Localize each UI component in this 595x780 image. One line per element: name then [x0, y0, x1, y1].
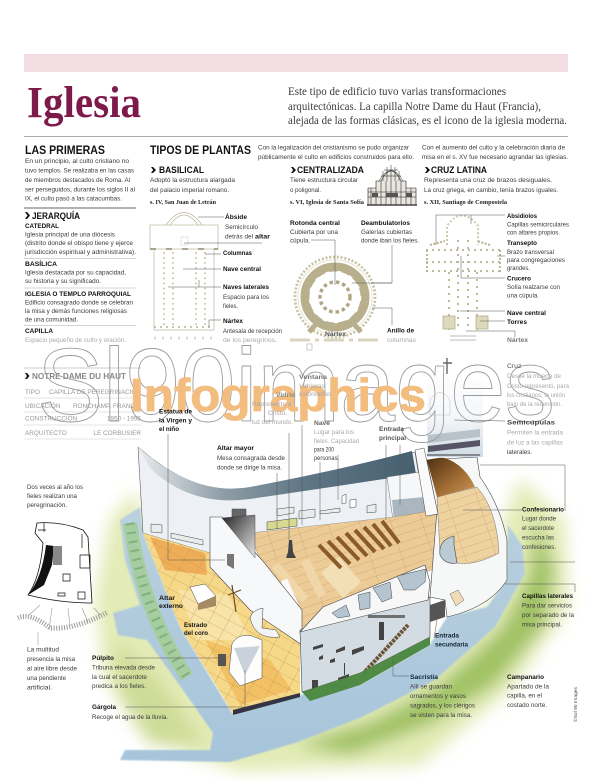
bell tower: [427, 358, 483, 457]
label: nave: fieles. Capacidad: [314, 438, 359, 445]
rotunda labels: Deambulatorios: [361, 220, 410, 227]
label: cruz: Cristo representó, para: [507, 383, 569, 390]
panel: jerarquía: Iglesia destacada por su capacidad,: [25, 270, 126, 276]
panel: jerarquía: IGLESIA O TEMPLO PARROQUIAL: [25, 291, 131, 298]
label: ventana: [299, 374, 332, 398]
panel: jerarquía: [24, 208, 136, 344]
basilica labels: Naves laterales: [223, 284, 269, 291]
cross plan labels: Capillas semicirculares: [507, 222, 570, 228]
panel: notre dame du haut: [24, 368, 142, 439]
basilica labels: altar: [255, 234, 270, 240]
label: sacristía: Sacristía: [410, 674, 438, 681]
brown semidome: [427, 458, 475, 497]
cross plan labels: Nave central: [507, 310, 546, 317]
crosses on platform: [228, 585, 241, 612]
panel: notre dame du haut: 1950 - 1955: [107, 416, 141, 422]
cross plan labels: Transepto: [507, 240, 537, 247]
intro text: alejada de las formas clásicas, es el icono de la iglesia moderna.: [288, 114, 567, 127]
heading: tipos de plantas: TIPOS DE PLANTAS: [150, 143, 251, 157]
label: entrada principal: principal: [379, 435, 406, 442]
intro text: arquitectónicas. La capilla Notre Dame du Haut (Francia),: [288, 100, 541, 113]
label: campanario: Apartado de la: [507, 684, 549, 690]
panel: jerarquía: Edificio consagrado donde se celebran: [25, 300, 133, 306]
label: estrado del coro: Estrado: [184, 622, 207, 629]
label: vidrio: Vidrio: [276, 392, 295, 399]
label: altar mayor: donde se dirige la misa.: [217, 464, 282, 472]
plan type: centralizada: Tiene estructura circular: [290, 177, 359, 184]
label: cruz: [507, 363, 569, 408]
label: sacristía: ornamentos y vasos: [410, 693, 467, 700]
small pilgrimage site plan: presencia la misa: [27, 656, 75, 663]
cross plan labels: Crucero: [507, 276, 531, 282]
south facade wall: [300, 597, 430, 692]
label: semicúpulas: [507, 420, 564, 456]
label: campanario: costado norte.: [507, 702, 547, 709]
rotunda labels: Rotonda central: [290, 220, 340, 227]
label: confesionario: Lugar donde: [522, 516, 556, 522]
label: estrado del coro: del coro: [184, 630, 208, 637]
roof underside: [138, 447, 416, 500]
label: campanario: [507, 674, 549, 709]
label: altar mayor: [217, 445, 285, 472]
panel: jerarquía: su historia y su significado.: [25, 278, 101, 285]
label: campanario: capilla, en el: [507, 692, 543, 700]
intro text: Este tipo de edificio tuvo varias transformaciones: [288, 85, 506, 98]
label: altar externo: [159, 595, 183, 610]
landscape: vegetation strip in moat: [130, 523, 187, 677]
intro text: [288, 85, 567, 127]
plan type: basilical: Adoptó la estructura alargada: [150, 177, 235, 184]
rotunda labels: [290, 220, 419, 344]
label: entrada principal: [379, 426, 406, 442]
facade windows: [312, 615, 405, 692]
label: confesionario: confesiones.: [522, 544, 556, 551]
plan type: centralizada: o poligonal.: [290, 187, 321, 194]
plan type: basilical: s. IV, San Juan de Letrán: [150, 200, 217, 206]
cross plan labels: Torres: [507, 319, 527, 326]
label: entrada secundaria: secundaria: [435, 642, 468, 648]
panel: jerarquía: de una comunidad.: [25, 316, 78, 324]
panel: notre dame du haut: RONCHAMP, FRANCIA: [73, 403, 142, 410]
label: confesionario: escucha las: [522, 534, 555, 542]
rotunda labels: Galerías cubiertas: [361, 229, 413, 236]
small pilgrimage site plan: peregrinación.: [27, 502, 67, 509]
label: cruz: bajo de la redención.: [507, 401, 562, 408]
panel: jerarquía: la misa y demás funciones religiosas: [25, 308, 128, 315]
exterior stairs: [360, 625, 408, 677]
label: ventana: Ventana: [299, 374, 327, 381]
plan type: cruz latina: [424, 165, 558, 206]
heading: tipos de plantas: misa en el s. XV fue necesario agrandar las iglesias.: [422, 154, 568, 161]
panel: notre dame du haut: CAPILLA DE PEREGRINACIÓN: [49, 387, 141, 396]
grey wall at right of nave: [387, 472, 426, 520]
small pilgrimage site plan: una pendiente: [27, 675, 66, 682]
cross plan labels: Solía realzarse con: [507, 284, 560, 291]
plan type: centralizada: [290, 165, 364, 206]
panel: las primeras: tuvo templos. Se realizaba en las casas: [25, 168, 135, 174]
small pilgrimage site plan: artificial.: [27, 684, 52, 692]
image credit: ©Sol 90 Images: [572, 686, 578, 722]
label: púlpito: [92, 655, 155, 690]
landscape: grass: [95, 478, 568, 772]
small pilgrimage site plan: fieles realizan una: [27, 493, 77, 500]
cross plan labels: con altares propios.: [507, 230, 560, 236]
panel: jerarquía: JERARQUÍA: [32, 211, 80, 222]
label: capillas laterales: por separado de la: [522, 612, 574, 619]
plan type: cruz latina: La cruz griega, en cambio, tenía brazos iguales.: [424, 187, 558, 194]
cross plan labels: [436, 213, 570, 344]
rotunda labels: columnas: [387, 337, 417, 344]
label: púlpito: predica a los fieles.: [92, 683, 146, 690]
rotunda labels: Nártex: [325, 331, 346, 338]
watermark: outline lettering: Sl90images: [37, 328, 555, 444]
panel: notre dame du haut: ARQUITECTO: [25, 430, 67, 437]
label: cruz: Cruz: [507, 363, 522, 370]
basilica labels: Ábside: [225, 212, 247, 221]
plan type: basilical: del palacio imperial romano.: [150, 187, 229, 194]
heading: tipos de plantas: públicamente el culto en edificios construidos para ello.: [258, 154, 414, 161]
white slanted wall: [210, 517, 302, 645]
south chapel tower: [229, 635, 262, 686]
basilica labels: [168, 212, 282, 344]
basilica labels: detrás del: [225, 234, 254, 240]
heading: tipos de plantas: [150, 143, 568, 161]
panel: jerarquía: Iglesia principal de una diócesis: [25, 232, 116, 238]
small pilgrimage site plan: Dos veces al año los: [27, 484, 84, 491]
panel: jerarquía: jurisdicción espiritual y administrativa).: [24, 249, 136, 256]
panel: notre dame du haut: LE CORBUSIER: [93, 430, 141, 437]
label: nave: para 200: [314, 446, 334, 454]
basilica labels: Semicírculo: [225, 224, 258, 231]
label: confesionario: el sacerdote: [522, 525, 554, 532]
label: semicúpulas: Permiten la entrada: [507, 430, 563, 436]
panel: notre dame du haut: CONSTRUCCIÓN: [25, 414, 78, 422]
label: sacristía: [410, 674, 476, 719]
basilica labels: Nave central: [223, 266, 261, 273]
outdoor altar: [190, 584, 216, 604]
round chapel: [440, 536, 457, 563]
east floor: [437, 487, 499, 564]
basilica labels: Columnas: [223, 250, 252, 257]
label: púlpito: Púlpito: [92, 655, 114, 662]
label: sacristía: se visten para la misa.: [410, 712, 472, 719]
panel: las primeras: En un principio, al culto cristiano no: [25, 158, 129, 165]
label: sacristía: sagrados, y los clérigos: [410, 702, 476, 710]
basilica labels: fieles.: [223, 303, 238, 310]
east curved wall: [427, 457, 507, 617]
plan type: basilical: [150, 165, 235, 206]
label: semicúpulas: de luz a las capillas: [507, 440, 564, 446]
label: nave: [314, 420, 359, 462]
rotunda labels: cúpula.: [290, 238, 310, 244]
landscape: water moat: [113, 507, 525, 762]
plan type: basilical: BASILICAL: [159, 165, 204, 176]
label: ventana: coloreadas: [299, 391, 332, 398]
label: capillas laterales: Para dar servicios: [522, 602, 573, 610]
cross plan labels: Nártex: [507, 337, 528, 344]
floor plan: basilica: [150, 212, 218, 338]
heading: tipos de plantas: Con el aumento del culto y la celebración diaria de: [422, 144, 565, 152]
panel: jerarquía: CAPILLA: [25, 328, 53, 335]
label: vidrio: Representa a: [252, 401, 292, 408]
label: nave: Lugar para los: [314, 429, 355, 436]
basilica labels: Nártex: [223, 318, 243, 325]
central column: [415, 448, 438, 516]
label: capillas laterales: Capillas laterales: [522, 593, 573, 600]
choir platform: [250, 608, 280, 637]
label: vidrio: Cristo,: [268, 410, 287, 417]
north wall: [138, 447, 425, 560]
chapels: [332, 569, 426, 618]
header banner: [24, 54, 568, 72]
panel: jerarquía: Espacio pequeño de culto y oración.: [25, 337, 126, 344]
church cutaway illustration: [130, 447, 507, 720]
label: estatua: la Virgen y: [159, 418, 192, 424]
label: gárgola: Gárgola: [92, 704, 116, 711]
rotunda labels: donde iban los fieles.: [361, 238, 419, 244]
exterior platform: [143, 533, 300, 713]
panel: jerarquía: (distrito donde el obispo tiene y ejerce: [25, 240, 133, 247]
label: entrada secundaria: Entrada: [435, 632, 459, 640]
rotunda labels: Anillo de: [387, 328, 414, 334]
plan type: cruz latina: s. XII, Santiago de Compostela: [424, 200, 507, 206]
basilica labels: de los peregrinos.: [223, 337, 277, 344]
label: gárgola: Recoge el agua de la lluvia.: [92, 714, 168, 721]
label: vidrio: [252, 392, 295, 426]
label: capillas laterales: [522, 593, 574, 628]
label: semicúpulas: Semicúpulas: [507, 420, 555, 426]
panel: jerarquía: CATEDRAL: [25, 223, 59, 230]
cross plan labels: para congregaciones: [507, 257, 566, 264]
small pilgrimage site plan: [18, 484, 108, 692]
watermark: orange lettering: Infographics: [130, 369, 426, 421]
panel: las primeras: [25, 143, 136, 202]
leader lines: [125, 420, 575, 707]
label: altar mayor: Altar mayor: [217, 445, 254, 452]
label: altar externo: externo: [159, 603, 183, 610]
label: púlpito: la cual el sacerdote: [92, 674, 147, 681]
panel: las primeras: LAS PRIMERAS: [25, 143, 105, 157]
plan type: cruz latina: Representa una cruz de brazos desiguales.: [424, 177, 552, 184]
cross plan labels: Absidiolos: [507, 213, 537, 220]
label: estrado del coro: [184, 622, 208, 637]
label: vidrio: luz del mundo.: [252, 419, 293, 426]
label: estatua: Estatua de: [159, 408, 192, 416]
floor plan: rotunda: [290, 257, 380, 350]
plan type: cruz latina: CRUZ LATINA: [431, 165, 487, 176]
panel: notre dame du haut: UBICACIÓN: [25, 401, 61, 410]
label: capillas laterales: misa principal.: [522, 622, 562, 628]
small pilgrimage site plan: al aire libre desde: [27, 666, 77, 672]
green strip: [302, 637, 430, 701]
panel: jerarquía: BASÍLICA: [25, 259, 57, 268]
label: entrada principal: Entrada: [379, 426, 404, 433]
label: entrada secundaria: [435, 632, 468, 648]
pews: [275, 521, 399, 605]
floor plan: latin cross: [426, 216, 501, 340]
panel: notre dame du haut: NOTRE DAME DU HAUT: [32, 371, 127, 381]
title: Iglesia: [27, 78, 141, 127]
small east altar: [450, 590, 464, 606]
cross plan labels: Brazo transversal: [507, 249, 554, 256]
label: cruz: Desde la muerte de: [507, 373, 561, 380]
altar figure: [286, 540, 296, 558]
plan type: centralizada: s. VI, Iglesia de Santa Sofía: [290, 200, 364, 206]
rotunda labels: Cubierta por una: [290, 229, 338, 236]
label: confesionario: [522, 506, 564, 551]
panel: las primeras: IX, el culto pasó a las catacumbas.: [25, 196, 122, 202]
label: campanario: Campanario: [507, 674, 544, 681]
label: sacristía: Allí se guardan: [410, 684, 452, 690]
label: cruz: los cristianos, la unión: [507, 392, 565, 399]
heading: tipos de plantas: Con la legalización del cristianismo se pudo organizar: [258, 144, 410, 152]
label: altar mayor: Mesa consagrada desde: [217, 455, 285, 462]
cross plan labels: una cúpula.: [507, 292, 539, 300]
label: ventana: Vidrieras: [299, 383, 326, 390]
panel: notre dame du haut: TIPO: [25, 389, 40, 396]
wall windows: [151, 494, 376, 545]
plan type: centralizada: CENTRALIZADA: [297, 165, 364, 176]
small pilgrimage site plan: La multitud: [27, 646, 59, 654]
entrance: [430, 600, 445, 622]
label: gárgola: [92, 704, 168, 721]
label: púlpito: Tribuna elevada desde: [92, 664, 155, 672]
panel: las primeras: ser perseguidos, durante los siglos II al: [25, 186, 136, 194]
label: confesionario: Confesionario: [522, 506, 564, 514]
cross plan labels: grandes.: [507, 265, 530, 272]
interior floor: [250, 510, 437, 632]
basilica labels: Antesala de recepción: [223, 328, 282, 335]
panel: las primeras: de miembros destacados de Roma. Al: [25, 177, 130, 184]
label: nave: personas.: [314, 455, 339, 462]
icon: santa sofia building: [367, 165, 417, 205]
label: semicúpulas: laterales.: [507, 449, 532, 456]
basilica labels: Espacio para los: [223, 294, 270, 301]
label: altar externo: Altar: [159, 595, 175, 602]
label: estatua: el niño: [159, 426, 179, 433]
label: nave: Nave: [314, 420, 330, 427]
label: estatua: [159, 408, 192, 433]
